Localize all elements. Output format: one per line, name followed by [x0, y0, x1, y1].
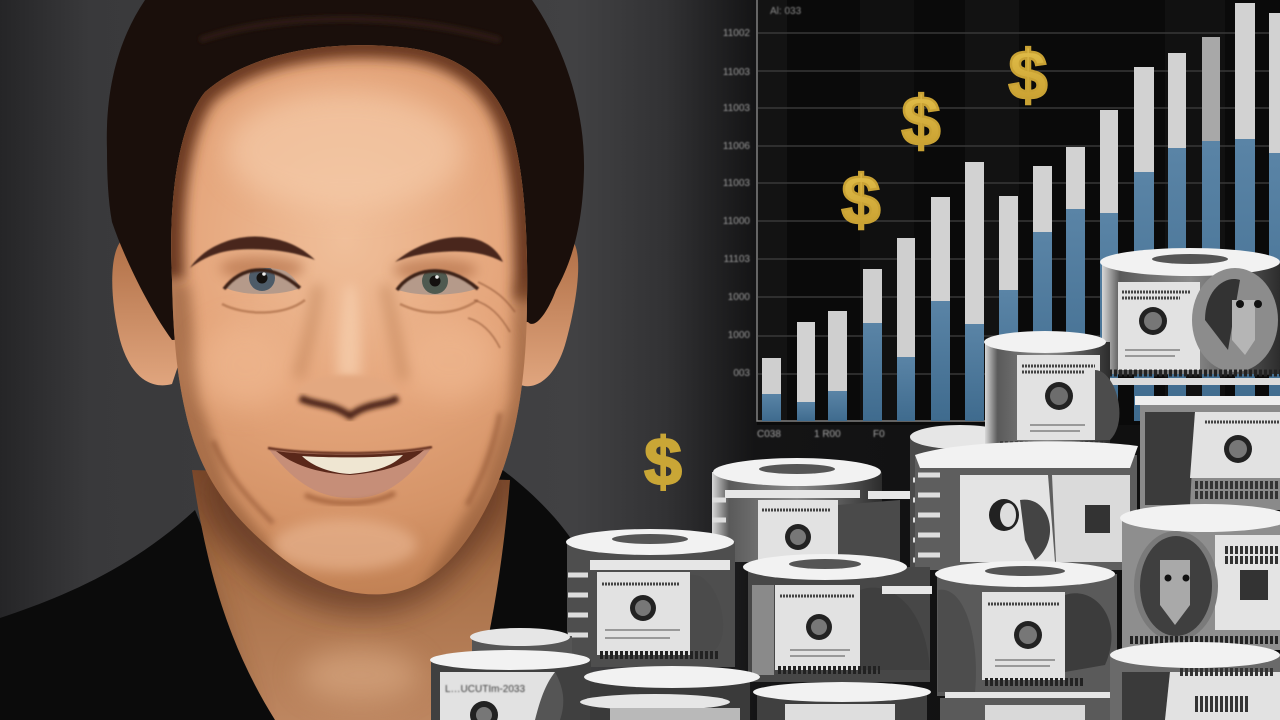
roll: bottom left: L…UCUTIm-2033 — [445, 684, 525, 695]
chart panel — [757, 0, 1280, 425]
black shirt — [0, 468, 580, 720]
category axis labels: F0 — [873, 429, 885, 440]
roll: bottom left — [430, 650, 591, 720]
left ear — [112, 238, 190, 385]
value axis labels: 11003 — [723, 103, 750, 114]
mouth — [268, 447, 432, 503]
value axis labels — [723, 28, 750, 379]
category axis labels: C038 — [757, 429, 781, 440]
roll: bottom right — [1110, 642, 1280, 720]
face — [171, 45, 528, 594]
roll: front middle — [743, 554, 932, 682]
right eyebrow — [395, 237, 503, 262]
roll: rear centre left — [712, 458, 910, 565]
hair — [107, 0, 584, 340]
roll: front centre right — [935, 561, 1117, 700]
icon: gold dollar sign 1: $ — [842, 161, 880, 239]
value axis labels: 003 — [733, 368, 750, 379]
nose base — [296, 376, 400, 416]
roll: centre wide — [915, 441, 1138, 570]
chart title: Al: 033 — [770, 6, 802, 17]
value axis labels: 11003 — [723, 67, 750, 78]
smile folds — [213, 441, 273, 523]
neck — [192, 470, 510, 720]
roll: small back left — [470, 628, 572, 656]
roll: upper right large — [1100, 248, 1280, 385]
roll: bottom centre right — [940, 698, 1110, 720]
value axis labels: 1000 — [728, 292, 750, 303]
forehead highlight — [225, 90, 465, 210]
crow's feet — [468, 282, 515, 348]
cheek highlights — [189, 334, 281, 406]
nose highlight — [337, 285, 361, 378]
roll: bottom middle left — [580, 666, 760, 720]
nose bridge shadow — [298, 285, 404, 380]
eye socket shadows — [220, 256, 304, 280]
roll: bottom middle — [753, 682, 931, 720]
category axis labels — [757, 429, 885, 440]
left eyebrow — [190, 237, 315, 268]
roll: right second row — [1135, 396, 1280, 510]
roll: front left — [566, 529, 735, 667]
money rolls pile — [430, 248, 1280, 720]
value axis labels: 11003 — [723, 178, 750, 189]
value axis labels: 11000 — [723, 216, 750, 227]
value axis labels: 11006 — [723, 141, 750, 152]
roll: upper middle — [984, 331, 1119, 448]
right eye — [394, 268, 480, 295]
stacked bars — [762, 3, 1280, 421]
man portrait — [0, 0, 584, 720]
roll: behind middle — [910, 425, 1010, 570]
hair highlights — [200, 19, 500, 40]
neck shading — [196, 472, 509, 706]
bar chart — [723, 0, 1280, 440]
hairline shadow — [171, 45, 527, 300]
value axis labels: 11002 — [723, 28, 750, 39]
chin highlight — [273, 519, 417, 571]
under-eye lines — [222, 300, 478, 313]
left eye — [222, 267, 302, 294]
category axis labels: 1 R00 — [814, 429, 841, 440]
icon: gold dollar sign 3: $ — [1009, 36, 1047, 114]
icon: gold dollar sign 4: $ — [644, 424, 682, 500]
roll: upper right third row — [1120, 504, 1280, 650]
side shadows — [165, 280, 280, 560]
value axis labels: 1000 — [728, 330, 750, 341]
grid lines — [757, 0, 1280, 421]
teeth — [302, 455, 403, 474]
icon: gold dollar sign 2: $ — [902, 82, 940, 160]
value axis labels: 11103 — [724, 254, 750, 265]
right ear — [510, 240, 578, 386]
